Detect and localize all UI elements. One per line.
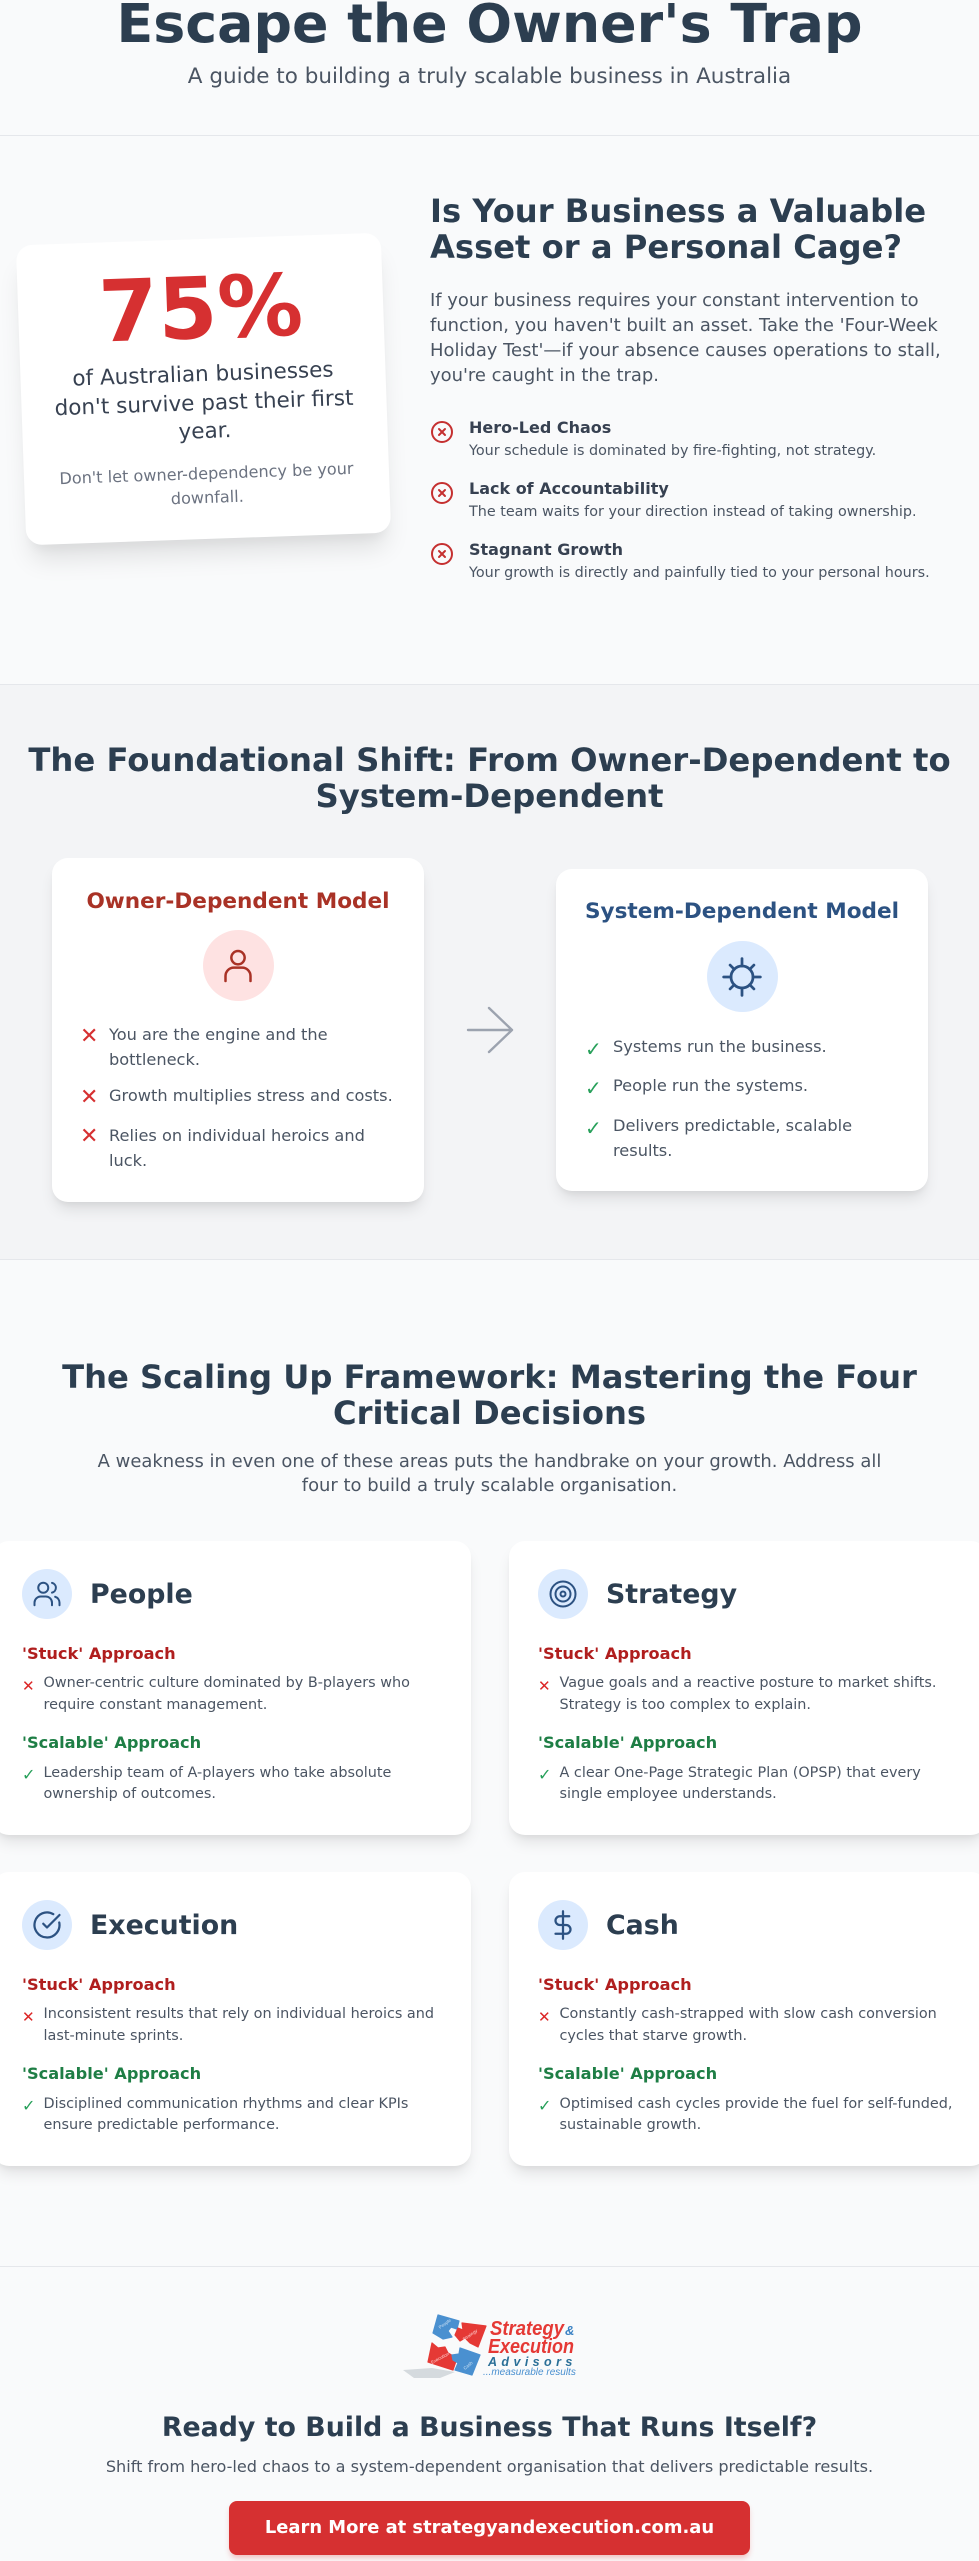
- symptom text: The team waits for your direction instead of taking ownership.: [469, 504, 917, 520]
- item marker: ✕: [80, 1024, 98, 1049]
- card: execution: [0, 1872, 471, 2166]
- item marker: ✓: [585, 1116, 602, 1140]
- symptom: stagnant growth: [431, 540, 930, 581]
- item text: People run the systems.: [613, 1076, 808, 1095]
- item text: Delivers predictable, scalable: [613, 1116, 852, 1135]
- logo: People: [438, 2317, 452, 2330]
- stuck label: 'Stuck' Approach: [22, 1644, 176, 1663]
- stat description: [54, 357, 354, 445]
- scalable text: [560, 2096, 952, 2133]
- section intro: [98, 1450, 881, 1496]
- scalable text: sustainable growth.: [560, 2117, 701, 2133]
- subtitle: A guide to building a truly scalable business in Australia: [188, 64, 791, 89]
- section heading: [62, 1358, 917, 1432]
- panel: the owner's trap: [16, 192, 941, 581]
- item text: Systems run the business.: [613, 1037, 827, 1056]
- icon: circle x: [431, 421, 453, 443]
- scalable text: Disciplined communication rhythms and clear KPIs: [44, 2096, 408, 2112]
- symptom text: Your growth is directly and painfully tied to your personal hours.: [469, 565, 930, 581]
- scalable label: 'Scalable' Approach: [22, 2064, 201, 2083]
- intro paragraph: If your business requires your constant intervention to: [430, 290, 919, 310]
- card title: Owner-Dependent Model: [86, 889, 390, 914]
- item text: results.: [613, 1141, 672, 1160]
- stuck text: [560, 2006, 937, 2044]
- scalable label: 'Scalable' Approach: [538, 2064, 717, 2083]
- icon: circle x: [431, 482, 453, 504]
- stat note: downfall.: [170, 487, 244, 508]
- intro paragraph: Holiday Test'—if your absence causes operations to stall,: [430, 340, 941, 360]
- symptom title: Lack of Accountability: [469, 479, 669, 498]
- card: cash: [509, 1872, 979, 2166]
- logo: ...measurable results: [483, 2367, 576, 2378]
- logo: &: [565, 2323, 574, 2338]
- intro paragraph: function, you haven't built an asset. Take the 'Four-Week: [430, 314, 938, 336]
- card: system-dependent model: [556, 869, 928, 1191]
- item marker: ✓: [585, 1037, 602, 1061]
- stuck text: Vague goals and a reactive posture to market shifts.: [560, 1675, 936, 1691]
- card: strategy: [509, 1541, 979, 1835]
- item text: Growth multiplies stress and costs.: [109, 1086, 393, 1105]
- item text: You are the engine and the: [109, 1025, 328, 1044]
- scalable text: ensure predictable performance.: [44, 2117, 280, 2133]
- icon: people: [22, 1569, 72, 1619]
- scalable text: [44, 2096, 408, 2133]
- scalable text: Leadership team of A-players who take absolute: [44, 1764, 391, 1780]
- logo: Advisors: [487, 2355, 577, 2369]
- stuck marker: ✕: [538, 2008, 551, 2026]
- icon: circle x: [431, 543, 453, 565]
- item text: [109, 1025, 328, 1069]
- section heading: The Foundational Shift: From Owner-Dependent to: [28, 741, 951, 779]
- symptom title: Hero-Led Chaos: [469, 418, 611, 437]
- card title: Cash: [606, 1910, 679, 1940]
- stuck marker: ✕: [22, 1677, 35, 1695]
- stat description: year.: [178, 418, 232, 445]
- icon: target: [538, 1569, 588, 1619]
- stuck text: [560, 1675, 936, 1712]
- scalable label: 'Scalable' Approach: [22, 1733, 201, 1752]
- section heading: The Scaling Up Framework: Mastering the Four: [62, 1358, 917, 1396]
- stuck text: last-minute sprints.: [44, 2028, 183, 2044]
- heading: Asset or a Personal Cage?: [430, 228, 902, 266]
- card title: Execution: [90, 1910, 238, 1940]
- icon: person: [202, 930, 274, 1001]
- section heading: System-Dependent: [315, 777, 664, 815]
- logo: Strategy: [490, 2318, 565, 2340]
- panel: footer call to action: [0, 2266, 979, 2561]
- icon: circle check: [22, 1900, 72, 1950]
- section intro: A weakness in even one of these areas puts the handbrake on your growth. Address all: [98, 1450, 881, 1472]
- scalable text: [44, 1764, 391, 1802]
- stuck text: [44, 1675, 410, 1712]
- symptom title: Stagnant Growth: [469, 540, 623, 559]
- panel: scaling up framework: [0, 1358, 979, 2176]
- symptom: hero-led chaos: [431, 418, 876, 459]
- scalable marker: ✓: [538, 2096, 551, 2115]
- symptom: lack of accountability: [431, 479, 917, 520]
- logo: Strategy: [462, 2328, 479, 2342]
- scalable text: A clear One-Page Strategic Plan (OPSP) that every: [560, 1764, 921, 1780]
- panel: foundational shift: [0, 684, 979, 1260]
- cta heading: Ready to Build a Business That Runs Itself?: [162, 2412, 817, 2443]
- header: [0, 0, 979, 136]
- arrow: [466, 1006, 514, 1054]
- card title: System-Dependent Model: [585, 899, 899, 924]
- stuck marker: ✕: [22, 2008, 35, 2026]
- scalable text: Optimised cash cycles provide the fuel for self-funded,: [560, 2096, 952, 2112]
- scalable marker: ✓: [538, 1765, 551, 1784]
- scalable text: single employee understands.: [560, 1786, 777, 1802]
- big number: 75%: [97, 257, 304, 363]
- scalable marker: ✓: [22, 1765, 35, 1784]
- logo: [403, 2314, 577, 2378]
- stuck text: Owner-centric culture dominated by B-players who: [44, 1675, 410, 1691]
- cta text: Shift from hero-led chaos to a system-dependent organisation that delivers predictable results.: [106, 2457, 873, 2476]
- stuck text: Constantly cash-strapped with slow cash conversion: [560, 2006, 937, 2022]
- scalable text: [560, 1764, 921, 1802]
- cta button: [229, 2500, 750, 2554]
- logo: Execution: [430, 2351, 450, 2365]
- scalable text: ownership of outcomes.: [44, 1786, 216, 1802]
- item text: bottleneck.: [109, 1050, 200, 1069]
- icon: dollar: [538, 1900, 588, 1950]
- card: people: [0, 1541, 471, 1835]
- stat card: 75%: [16, 233, 391, 545]
- card title: Strategy: [606, 1578, 737, 1610]
- stat note: Don't let owner-dependency be your: [59, 459, 354, 488]
- intro paragraph: you're caught in the trap.: [430, 364, 659, 386]
- item marker: ✕: [80, 1085, 98, 1110]
- item text: [613, 1116, 852, 1160]
- section heading: [28, 741, 951, 815]
- icon: system gear: [706, 941, 778, 1012]
- stuck text: Inconsistent results that rely on individual heroics and: [44, 2006, 434, 2022]
- stuck text: [44, 2006, 434, 2044]
- heading: [430, 192, 926, 266]
- stuck text: Strategy is too complex to explain.: [560, 1696, 811, 1712]
- card title: People: [90, 1578, 193, 1610]
- logo: Cash: [462, 2360, 474, 2371]
- cta button: Learn More at strategyandexecution.com.au: [265, 2516, 714, 2538]
- stat note: [59, 459, 354, 508]
- heading: Is Your Business a Valuable: [430, 192, 926, 230]
- section heading: Critical Decisions: [333, 1394, 646, 1432]
- item text: [109, 1126, 365, 1170]
- stuck marker: ✕: [538, 1677, 551, 1695]
- intro paragraph: [430, 290, 941, 386]
- stuck label: 'Stuck' Approach: [538, 1975, 692, 1994]
- card: owner-dependent model: [52, 858, 424, 1202]
- item text: Relies on individual heroics and: [109, 1126, 365, 1144]
- stat description: of Australian businesses: [72, 357, 334, 392]
- section intro: four to build a truly scalable organisation.: [302, 1474, 677, 1496]
- scalable label: 'Scalable' Approach: [538, 1733, 717, 1752]
- stuck label: 'Stuck' Approach: [538, 1644, 692, 1663]
- scalable marker: ✓: [22, 2096, 35, 2115]
- stat description: don't survive past their first: [54, 385, 354, 421]
- symptom text: Your schedule is dominated by fire-fighting, not strategy.: [469, 443, 876, 459]
- item text: luck.: [109, 1150, 147, 1170]
- stuck text: require constant management.: [44, 1696, 267, 1712]
- stuck text: cycles that starve growth.: [560, 2028, 747, 2044]
- stuck label: 'Stuck' Approach: [22, 1975, 176, 1994]
- item marker: ✕: [80, 1124, 98, 1149]
- item marker: ✓: [585, 1076, 602, 1100]
